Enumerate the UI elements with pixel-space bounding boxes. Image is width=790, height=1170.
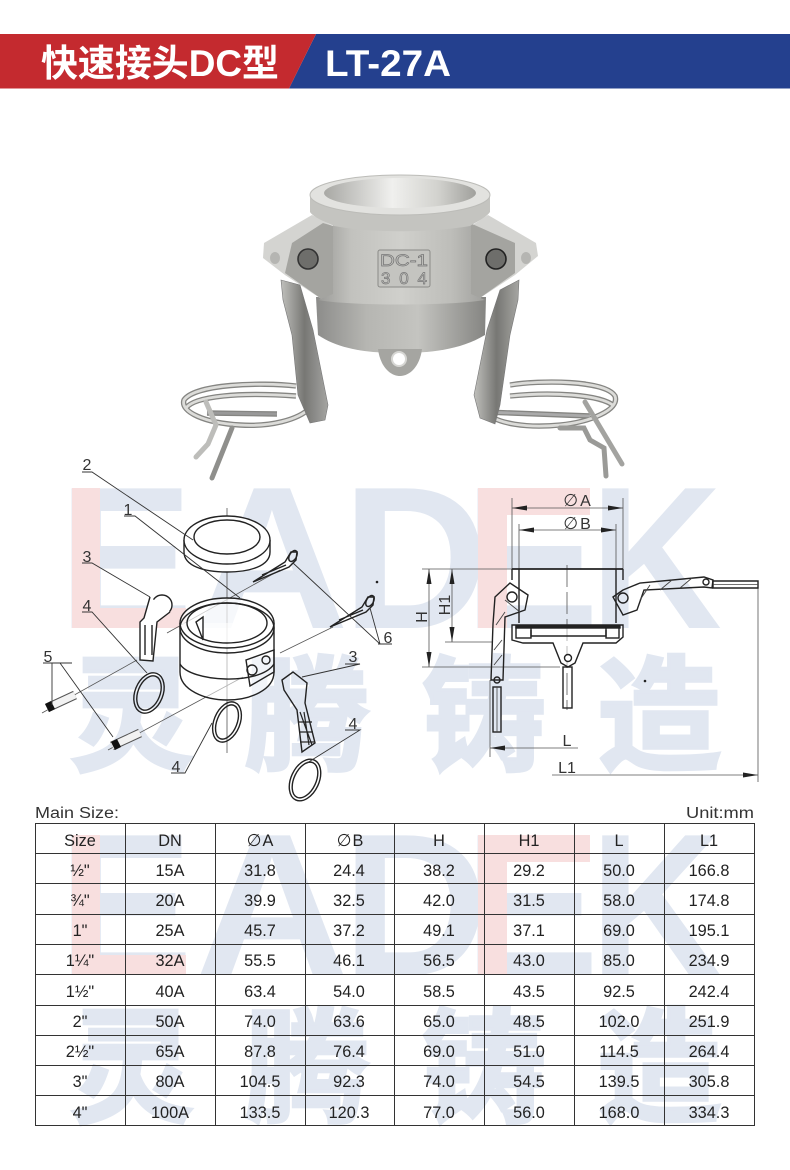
table: row 3 inch: 74.0 xyxy=(423,1073,455,1091)
table: row 2 1/2 inch: 87.8 xyxy=(244,1043,276,1061)
table: row 1 inch: 37.1 xyxy=(513,922,545,940)
photo: left cotter pin xyxy=(196,402,232,478)
photo: right cotter pin xyxy=(560,402,622,476)
table: row 1 1/2 inch: 242.4 xyxy=(689,983,729,1001)
watermark: upper EADEK logo: A xyxy=(195,446,349,672)
product photo: stainless steel DC coupler xyxy=(184,175,622,478)
photo: right cam arm xyxy=(474,280,519,424)
watermark: lower EADEK logo: K xyxy=(590,791,722,1018)
table: row 2 inch: 74.0 xyxy=(244,1013,276,1031)
header: blue panel xyxy=(289,34,790,88)
table: row 4 inch: 4" xyxy=(73,1104,88,1122)
section: centre tab pin xyxy=(563,667,572,708)
table: row 4 inch: 120.3 xyxy=(329,1104,369,1122)
exploded: part number labels: 6 xyxy=(384,630,393,647)
table: row 1 inch: 45.7 xyxy=(244,922,276,940)
table: row 1 inch: 49.1 xyxy=(423,922,455,940)
table: row 2 1/2 inch: 69.0 xyxy=(423,1043,455,1061)
table: row 3/4 inch: 42.0 xyxy=(423,892,455,910)
exploded view drawing with part numbers xyxy=(42,457,393,806)
exploded: part number labels: 1 xyxy=(124,502,133,519)
watermark: lower Chinese brand characters: 腾 xyxy=(245,968,369,1148)
table: row 4 inch: 334.3 xyxy=(689,1104,729,1122)
exploded: part number labels: 4 xyxy=(349,716,358,733)
watermark: upper Chinese brand characters: 腾 xyxy=(245,616,369,796)
watermark: lower EADEK logo: E xyxy=(464,792,599,1019)
table: row 1 1/2 inch: 40A xyxy=(156,983,185,1001)
table: row 1/2 inch: 24.4 xyxy=(333,862,365,880)
table: row 3/4 inch: 20A xyxy=(156,892,185,910)
watermark: lower EADEK logo: A xyxy=(195,793,349,1019)
header banner xyxy=(0,34,790,88)
watermark: lower Chinese brand characters xyxy=(70,968,721,1148)
stray dot near exploded view xyxy=(376,581,378,583)
table: header row: L xyxy=(614,832,624,850)
table: grid xyxy=(35,823,755,1126)
watermark: upper Chinese brand characters: 铸 xyxy=(422,616,546,796)
table: row 3/4 inch: 174.8 xyxy=(689,892,729,910)
section: dimension labels: L xyxy=(563,733,572,750)
photo: lower collar xyxy=(316,297,486,353)
table: row 4 inch: 77.0 xyxy=(423,1104,455,1122)
table: row 3 inch: 104.5 xyxy=(240,1073,280,1091)
table: row 2 inch: 251.9 xyxy=(689,1013,729,1031)
table: row 2 inch: 48.5 xyxy=(513,1013,545,1031)
table: row 3/4 inch: 31.5 xyxy=(513,892,545,910)
table: row 3/4 inch: 39.9 xyxy=(244,892,276,910)
photo: right lug xyxy=(470,215,538,300)
watermark: upper EADEK logo: E xyxy=(58,445,193,672)
table: row 2 1/2 inch xyxy=(66,1043,729,1061)
exploded: part number labels: 5 xyxy=(44,649,53,666)
table: row 1 1/4 inch: 55.5 xyxy=(244,952,276,970)
photo: embossed marking DC-1: DC-1 xyxy=(380,251,428,270)
table: row 4 inch: 100A xyxy=(151,1104,189,1122)
photo: central body xyxy=(318,224,485,304)
table: row 1 1/4 inch: 85.0 xyxy=(603,952,635,970)
table: row 1 inch: 1" xyxy=(73,922,88,940)
section: dimension labels xyxy=(414,491,591,777)
table: row 2 inch: 63.6 xyxy=(333,1013,365,1031)
table: row 2 1/2 inch: 51.0 xyxy=(513,1043,545,1061)
watermark: upper EADEK logo: D xyxy=(342,445,489,672)
photo: right ring xyxy=(483,382,616,426)
exploded: part 3 right cam lever xyxy=(282,672,315,752)
table: row 2 1/2 inch: 76.4 xyxy=(333,1043,365,1061)
table: row 1 1/2 inch: 92.5 xyxy=(603,983,635,1001)
table: row 1/2 inch: ½" xyxy=(70,862,90,880)
photo: top rim xyxy=(310,175,490,215)
table: row 3 inch: 3" xyxy=(73,1073,88,1091)
table: row 1 1/4 inch: 43.0 xyxy=(513,952,545,970)
table: header row: Size xyxy=(64,832,96,850)
section: right lever and cotter pin xyxy=(613,577,758,615)
table: header row: ∅A xyxy=(247,831,273,851)
exploded: part number labels: 3 xyxy=(349,649,358,666)
table: row 1 1/2 inch: 1½" xyxy=(66,983,94,1001)
table: row 3 inch: 80A xyxy=(156,1073,185,1091)
table: row 2 inch xyxy=(73,1013,729,1031)
exploded: part 3 left cam lever xyxy=(140,595,172,661)
photo: bore interior xyxy=(324,178,476,208)
table caption: main size: Main Size: xyxy=(35,805,119,822)
table: row 1 inch: 69.0 xyxy=(603,922,635,940)
watermark: upper EADEK logo: E xyxy=(464,445,599,672)
exploded: part number labels: 2 xyxy=(83,457,92,474)
exploded: part number labels: 3 xyxy=(83,549,92,566)
table: row 4 inch: 56.0 xyxy=(513,1104,545,1122)
exploded: part 6 cotter pins xyxy=(253,549,376,627)
exploded: leader lines xyxy=(43,472,392,773)
table: row 4 inch: 168.0 xyxy=(599,1104,639,1122)
watermark: upper EADEK logo xyxy=(58,444,722,672)
table: row 1/2 inch: 29.2 xyxy=(513,862,545,880)
table: row 1/2 inch: 166.8 xyxy=(689,862,729,880)
table: row 2 1/2 inch: 264.4 xyxy=(689,1043,729,1061)
watermark: lower EADEK logo xyxy=(58,791,722,1019)
table: row 1 1/2 inch: 58.5 xyxy=(423,983,455,1001)
exploded: centre and pin axis lines xyxy=(42,508,333,753)
table: row 1/2 inch: 31.8 xyxy=(244,862,276,880)
header: product name: 快速接头DC型 xyxy=(41,43,279,84)
table: row 1 1/2 inch: 43.5 xyxy=(513,983,545,1001)
photo: left ring xyxy=(184,384,310,425)
table: row 1/2 inch: 15A xyxy=(156,862,185,880)
watermark: lower Chinese brand characters: 灵 xyxy=(70,968,194,1148)
header: model number: LT-27A xyxy=(325,43,451,84)
table: row 1 inch: 195.1 xyxy=(689,922,729,940)
watermark: upper EADEK logo: K xyxy=(590,444,722,671)
table: row 3/4 inch: ¾" xyxy=(70,892,90,910)
photo: neck xyxy=(310,196,490,231)
table: row 4 inch: 133.5 xyxy=(240,1104,280,1122)
table: row 2 1/2 inch: 2½" xyxy=(66,1043,94,1061)
table: row 1 1/4 inch: 234.9 xyxy=(689,952,729,970)
table: row 1/2 inch: 38.2 xyxy=(423,862,455,880)
exploded: part number labels: 4 xyxy=(83,598,92,615)
table: row 1/2 inch: 50.0 xyxy=(603,862,635,880)
table: row 3 inch: 305.8 xyxy=(689,1073,729,1091)
table caption: unit: Unit:mm xyxy=(686,805,754,822)
table: row 1 1/2 inch: 63.4 xyxy=(244,983,276,1001)
table: row 1 1/2 inch: 54.0 xyxy=(333,983,365,1001)
section: dimension lines xyxy=(422,498,758,782)
table: row 1 inch: 25A xyxy=(156,922,185,940)
stray dot near section view xyxy=(644,680,646,682)
table: row 1 1/4 inch: 46.1 xyxy=(333,952,365,970)
table: row 3/4 inch: 58.0 xyxy=(603,892,635,910)
watermark: lower EADEK logo: E xyxy=(58,792,193,1019)
table: row 1 1/4 inch: 32A xyxy=(156,952,185,970)
table: header row: DN xyxy=(158,832,182,850)
table: header row: H xyxy=(433,832,445,850)
table: row 1 inch xyxy=(73,922,729,940)
photo: left cam arm xyxy=(281,280,328,423)
photo: embossed marking 304: 304 xyxy=(381,269,427,288)
table: row 2 inch: 50A xyxy=(156,1013,185,1031)
watermark: upper Chinese brand characters: 造 xyxy=(597,616,721,796)
section view dimension drawing xyxy=(414,491,758,782)
photo: left lug xyxy=(263,215,333,300)
watermark: upper Chinese brand characters: 灵 xyxy=(70,616,194,796)
table: row 2 inch: 65.0 xyxy=(423,1013,455,1031)
table: row 2 1/2 inch: 114.5 xyxy=(599,1043,639,1061)
section: dimension labels: ∅A xyxy=(563,491,591,511)
table: header row xyxy=(64,831,718,851)
exploded: part number labels: 4 xyxy=(172,759,181,776)
section: left lever and cotter pin xyxy=(491,583,528,732)
table: row 1 1/2 inch xyxy=(66,983,729,1001)
table: row 3/4 inch: 32.5 xyxy=(333,892,365,910)
photo: embossed DC-1 304 plate xyxy=(378,250,430,288)
exploded: part number labels xyxy=(44,457,393,776)
header: red panel xyxy=(0,34,316,88)
table: header row: L1 xyxy=(700,832,718,850)
section: dimension labels: H1 xyxy=(437,595,454,615)
section: coupler body outline xyxy=(512,569,623,667)
section: dimension labels: ∅B xyxy=(563,514,591,534)
table: row 1 1/4 inch: 56.5 xyxy=(423,952,455,970)
table: row 3 inch xyxy=(73,1073,729,1091)
section: dimension labels: L1 xyxy=(558,760,576,777)
table: row 3 inch: 54.5 xyxy=(513,1073,545,1091)
table: row 4 inch xyxy=(73,1104,729,1122)
table: row 1 1/4 inch: 1¼" xyxy=(66,952,94,970)
table: row 1/2 inch xyxy=(70,862,729,880)
watermark: lower EADEK logo: D xyxy=(342,792,489,1019)
watermark: lower Chinese brand characters: 铸 xyxy=(422,968,546,1148)
table: header row: ∅B xyxy=(337,831,363,851)
exploded: part 1 coupler body xyxy=(180,598,274,700)
table: row 3/4 inch xyxy=(70,892,729,910)
section: dimension labels: H xyxy=(414,611,431,623)
table: row 1 1/4 inch xyxy=(66,952,729,970)
exploded: part 2 seal ring xyxy=(184,516,270,572)
table: row 2 inch: 102.0 xyxy=(599,1013,639,1031)
table: row 1 inch: 37.2 xyxy=(333,922,365,940)
table: row 3 inch: 92.3 xyxy=(333,1073,365,1091)
table: row 3 inch: 139.5 xyxy=(599,1073,639,1091)
size table xyxy=(35,823,755,1126)
watermark: upper Chinese brand characters xyxy=(70,616,721,796)
table: header row: H1 xyxy=(519,832,539,850)
watermark: lower Chinese brand characters: 造 xyxy=(597,968,721,1148)
exploded: part 4 rings xyxy=(128,668,327,806)
photo: bottom tab with hole xyxy=(378,349,422,376)
table: row 2 inch: 2" xyxy=(73,1013,88,1031)
table: row 2 1/2 inch: 65A xyxy=(156,1043,185,1061)
section: dimension arrows xyxy=(426,506,758,778)
exploded: part 5 pins xyxy=(47,695,140,746)
